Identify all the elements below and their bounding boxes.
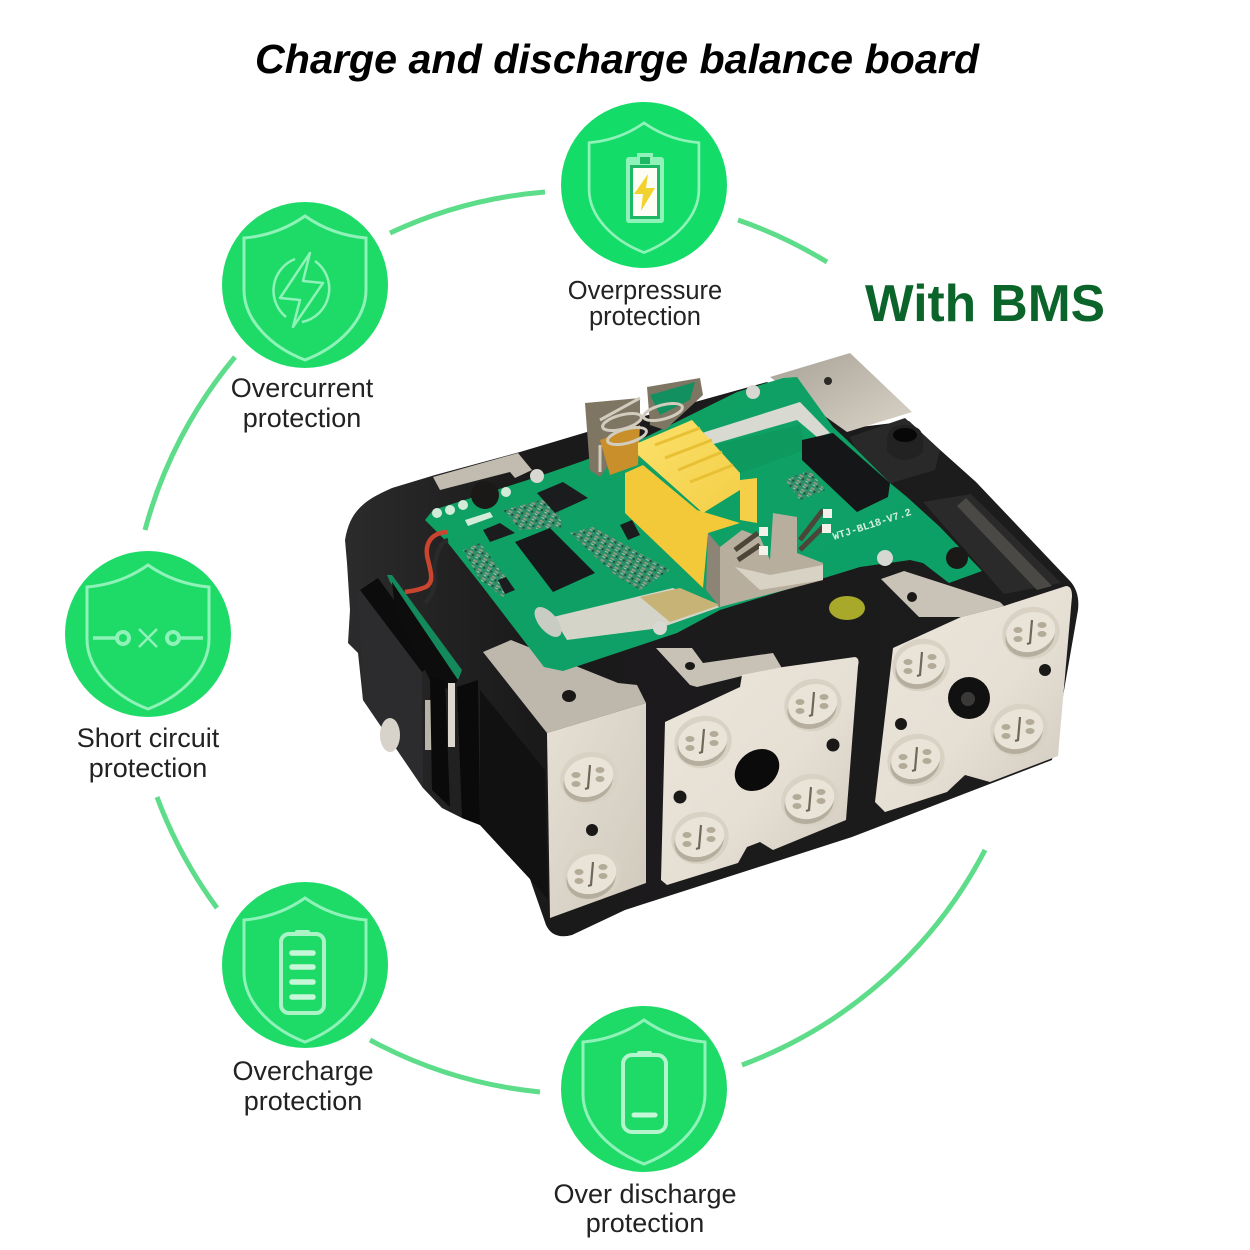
right plate fixtures — [880, 592, 1067, 794]
screws — [471, 481, 499, 509]
middle plate fixtures — [664, 662, 849, 872]
test pads — [432, 487, 511, 526]
icon: over discharge protection — [561, 1006, 727, 1172]
middle plate — [661, 657, 859, 885]
small chips — [537, 482, 588, 513]
icon: short circuit protection — [65, 551, 231, 717]
solder strip bottom — [553, 588, 720, 640]
metal terminals back — [585, 378, 703, 477]
label: overcurrent: protection — [243, 403, 361, 433]
label: short circuit: protection — [89, 753, 207, 783]
right plate — [875, 586, 1072, 812]
label: over discharge: protection — [586, 1208, 704, 1238]
top metal tab — [770, 353, 912, 432]
ring arc segments — [145, 192, 985, 1092]
icon: overcurrent protection — [222, 202, 388, 368]
label: overcharge: protection — [244, 1086, 362, 1116]
PCB darker trace area — [715, 425, 805, 475]
left plate face — [547, 703, 646, 918]
solder pads — [530, 469, 544, 483]
PCB board — [425, 377, 982, 671]
side display module — [358, 575, 548, 900]
board marking: WTJ-BL18-V7.2 — [832, 507, 913, 544]
left plate fixtures — [553, 690, 628, 909]
wires — [405, 532, 448, 603]
icon: overpressure protection — [561, 102, 727, 268]
photo: battery pack with BMS board — [345, 353, 1078, 936]
icon: overcharge protection — [222, 882, 388, 1048]
label: overpressure: Overpressure — [568, 277, 722, 305]
main chip — [515, 528, 595, 592]
heading: With BMS: With BMS — [865, 275, 1105, 333]
label: overcharge: Overcharge — [232, 1056, 374, 1086]
middle plate tab — [656, 648, 783, 687]
left plate top — [483, 640, 646, 733]
yellow connector — [625, 420, 757, 588]
body right side shading — [923, 494, 1061, 594]
metal terminal front — [706, 509, 832, 607]
label: overpressure: protection — [589, 303, 701, 331]
battery body — [345, 382, 1078, 936]
right plate tab — [881, 571, 1004, 617]
SMD component clusters — [463, 470, 825, 597]
rubber grommet — [850, 418, 940, 485]
label: overcurrent: Overcurrent — [231, 373, 374, 403]
left top tab — [433, 453, 532, 490]
title: Charge and discharge balance board — [255, 36, 980, 82]
socket — [802, 433, 890, 512]
label: short circuit: Short circuit — [77, 723, 220, 753]
gap detail under board — [829, 596, 865, 620]
solder strip top — [702, 402, 830, 445]
label: over discharge: Over discharge — [553, 1179, 737, 1209]
